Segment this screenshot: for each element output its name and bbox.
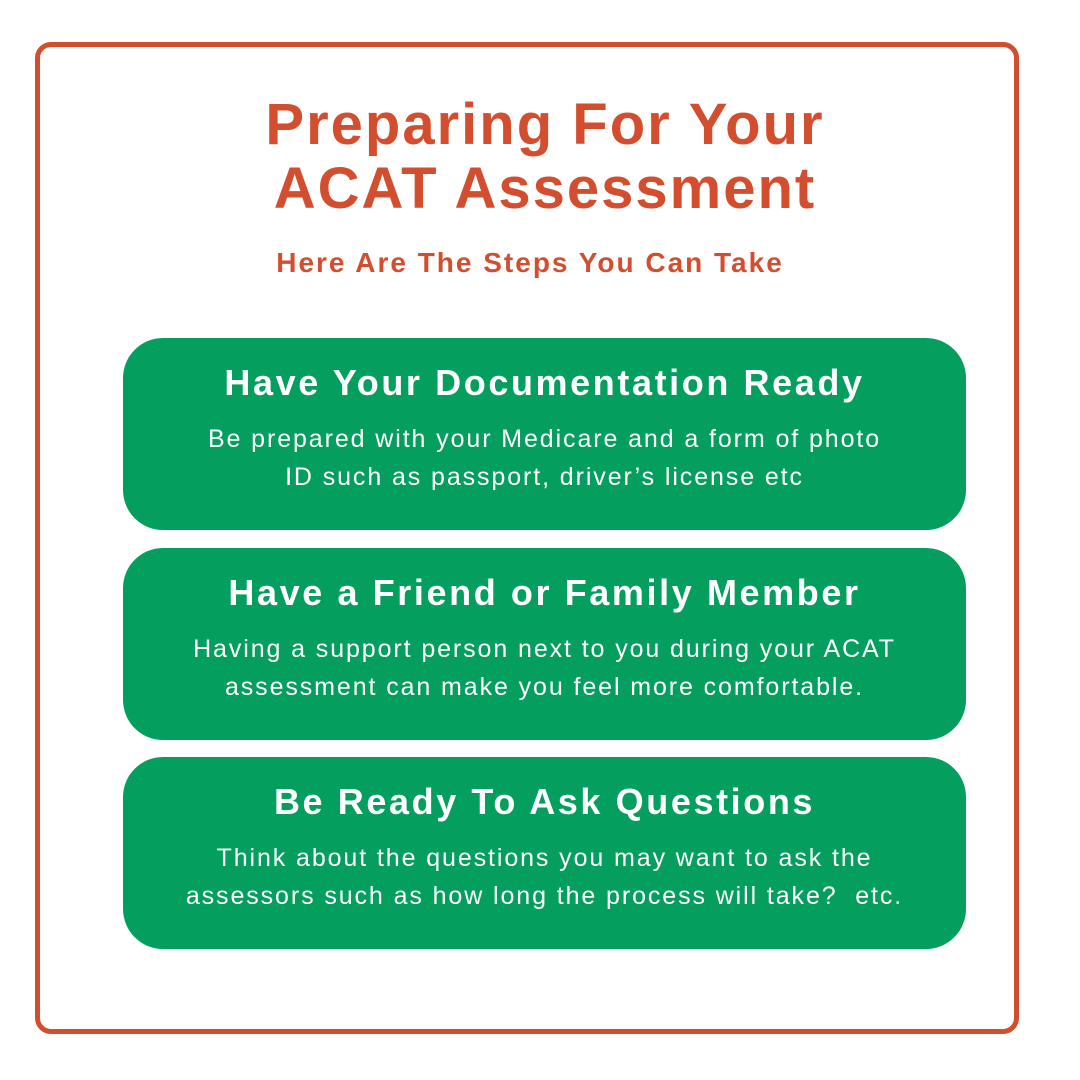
card: friend	[123, 548, 966, 740]
title	[265, 92, 825, 221]
text	[193, 635, 896, 701]
card: questions	[123, 757, 966, 949]
title: Preparing For Your	[265, 92, 825, 157]
heading: Have Your Documentation Ready	[224, 362, 865, 403]
heading: Have a Friend or Family Member	[228, 572, 861, 613]
heading: Be Ready To Ask Questions	[274, 781, 815, 822]
text	[186, 844, 903, 910]
card: documentation	[123, 338, 966, 530]
text: assessors such as how long the process will take? etc.	[186, 882, 903, 910]
text: Having a support person next to you during your ACAT	[193, 635, 896, 663]
text: Think about the questions you may want to ask the	[217, 844, 872, 872]
subtitle: Here Are The Steps You Can Take	[276, 247, 784, 278]
text: assessment can make you feel more comfortable.	[225, 673, 864, 701]
text: ID such as passport, driver’s license etc	[285, 463, 804, 491]
text	[208, 425, 881, 491]
text: Be prepared with your Medicare and a form of photo	[208, 425, 881, 453]
title: ACAT Assessment	[274, 156, 816, 221]
